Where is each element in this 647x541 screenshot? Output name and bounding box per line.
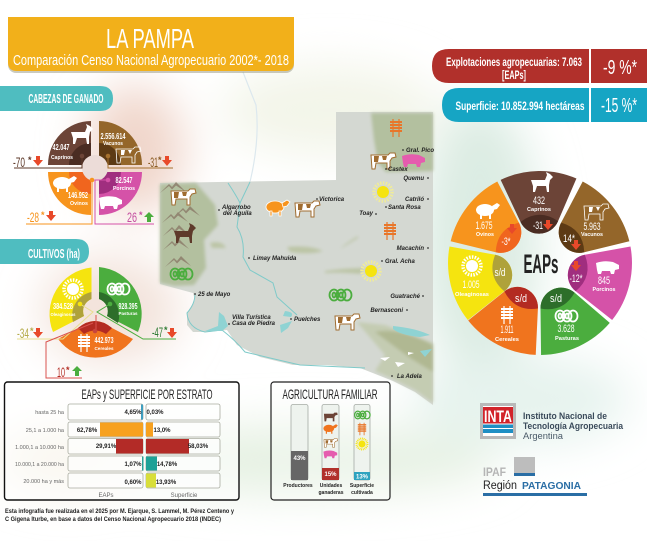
- map localities: Villa Turística: [232, 315, 271, 321]
- chart: livestock head count: 42.047: [52, 143, 70, 152]
- logo: IPAF Región Patagonia: IPAF: [483, 465, 506, 479]
- map localities: Gral. Pico: [406, 148, 434, 154]
- panel: agricultura familiar: Superficie: [350, 483, 374, 489]
- livestock change: caprinos: -70: [13, 154, 25, 170]
- EAPs values: Ovinos: [476, 232, 494, 238]
- wedge: oleaginosas: [442, 233, 521, 322]
- crop change: pasturas: *: [164, 325, 168, 335]
- chart: crop area: 442.973: [94, 336, 114, 345]
- livestock change: caprinos: *: [28, 155, 32, 165]
- map localities: Guatraché: [390, 294, 421, 300]
- panel: EAPs y superficie por estrato: EAPs: [98, 493, 114, 499]
- chart: livestock head count: Vacunos: [103, 141, 123, 147]
- callout: superficie: Superficie: 10.852.994 hectáreas: [456, 99, 585, 113]
- panel: EAPs y superficie por estrato: 0,03%: [146, 410, 164, 416]
- callout: explotaciones agropecuarias: [432, 49, 647, 83]
- livestock change: vacunos: *: [158, 155, 162, 165]
- EAPs icons: [463, 172, 619, 324]
- chart: livestock head count: 146.952: [68, 191, 88, 200]
- chart: crop area: [17, 267, 176, 378]
- panel: agricultura familiar: 15%: [324, 472, 337, 478]
- EAPs values: -3*: [502, 236, 511, 248]
- EAPs values: s/d: [550, 293, 562, 305]
- livestock change: porcinos: 26: [127, 209, 137, 225]
- livestock change: ovinos: -28: [27, 209, 39, 225]
- chart: livestock head count: Ovinos: [70, 201, 88, 207]
- livestock change: vacunos: -31: [148, 154, 158, 170]
- chart: EAPs radial: EAPs: [524, 249, 558, 279]
- chart: livestock head count: 82.547: [116, 176, 133, 185]
- logo: IPAF Región Patagonia: Región: [483, 480, 517, 492]
- map localities: Bernasconi: [370, 308, 403, 314]
- EAPs values: 1.005: [462, 279, 480, 291]
- crop change: oleaginosas: *: [30, 326, 34, 336]
- panel: EAPs y superficie por estrato: 1,07%: [124, 462, 142, 468]
- chart: crop area: Pasturas: [118, 311, 138, 317]
- EAPs values: 1.911: [500, 324, 514, 336]
- wedge: vacunos: [540, 177, 636, 275]
- wedge: pasturas: [518, 274, 613, 362]
- livestock change: porcinos: *: [139, 210, 143, 220]
- chart: livestock head count: Caprinos: [51, 155, 73, 161]
- EAPs values: 3.628: [558, 323, 574, 335]
- map localities: Quemu: [403, 176, 424, 182]
- credits text: [5, 509, 235, 523]
- panel: EAPs y superficie por estrato: 14,78%: [157, 462, 178, 468]
- EAPs values: Vacunos: [581, 232, 603, 238]
- map localities: Toay: [359, 211, 374, 217]
- logo: INTA: [480, 403, 624, 441]
- panel: agricultura familiar: Unidades: [320, 483, 342, 489]
- chart: EAPs radial: [442, 170, 638, 362]
- EAPs values: 14*: [563, 233, 576, 245]
- panel: agricultura familiar: ganaderas: [318, 490, 344, 496]
- heading: cabezas de ganado: CABEZAS DE GANADO: [28, 92, 104, 106]
- map localities: Victorica: [319, 197, 345, 203]
- crop change: cereales: [57, 364, 82, 380]
- panel: EAPs y superficie por estrato: 13,0%: [153, 428, 171, 434]
- credits text: C Gigena Iturbe, en base a datos del Censo Nacional Agropecuario 2018 (INDEC): [5, 517, 221, 523]
- wedge: caprinos: [501, 170, 577, 234]
- panel: EAPs y superficie por estrato: 0,60%: [124, 480, 142, 486]
- EAPs values: Cereales: [495, 337, 519, 343]
- map mountains: [160, 182, 200, 267]
- callout: explotaciones agropecuarias: Explotaciones agropecuarias: 7.063: [446, 55, 582, 69]
- heading: cultivos: CULTIVOS (ha): [28, 246, 80, 261]
- panel: EAPs y superficie por estrato: 4,65%: [124, 410, 142, 416]
- wedge: porcinos: [559, 233, 638, 322]
- crop change: pasturas: -47: [152, 324, 163, 340]
- callout: explotaciones agropecuarias: [EAPs]: [502, 68, 526, 82]
- wedge: ovinos: [444, 177, 540, 275]
- crop change: cereales: *: [66, 365, 70, 375]
- map localities: Catriló: [405, 197, 424, 203]
- EAPs values: 845: [598, 275, 610, 287]
- panel: EAPs y superficie por estrato: 13,93%: [156, 480, 177, 486]
- crop change: cereales: 10: [57, 364, 65, 380]
- map localities: Castex: [388, 167, 408, 173]
- credits text: Esta infografía fue realizada en el 2025 por M. Ejarque, S. Lammel, M. Pérez Centeno y: [5, 509, 235, 515]
- EAPs values: 432: [533, 195, 545, 207]
- chart: crop area: Oleaginosas: [50, 312, 76, 318]
- panel: EAPs y superficie por estrato: EAPs y SUPERFICIE POR ESTRATO: [82, 386, 213, 402]
- panel: agricultura familiar: AGRICULTURA FAMILIAR: [282, 386, 378, 402]
- livestock change: ovinos: [27, 209, 56, 225]
- wedge: cereales: [464, 272, 560, 362]
- panel: agricultura familiar: 13%: [356, 474, 369, 480]
- panel: agricultura familiar: 43%: [293, 456, 306, 462]
- title banner: LA PAMPA: [106, 23, 194, 54]
- map localities: Algarrobo: [221, 205, 251, 211]
- EAPs values: Pasturas: [555, 336, 579, 342]
- panel: EAPs y superficie por estrato: [4, 382, 239, 500]
- logo: INTA: Tecnología Agropecuaria: [523, 421, 624, 431]
- panel: EAPs y superficie por estrato: hasta 25 ha: [35, 410, 65, 416]
- EAPs values: Oleaginosas: [455, 292, 489, 298]
- EAPs values: 1.675: [476, 220, 492, 232]
- chart: livestock head count: [14, 121, 173, 224]
- logo: INTA: Instituto Nacional de: [523, 411, 607, 421]
- panel: EAPs y superficie por estrato: Superficie: [171, 493, 198, 499]
- map: La Pampa province: [160, 112, 433, 405]
- map localities: Macachín: [397, 246, 424, 252]
- logo: IPAF Región Patagonia: PATAGONIA: [522, 481, 581, 492]
- EAPs values: 5.963: [584, 221, 600, 233]
- panel: EAPs y superficie por estrato: 29,91%: [96, 444, 117, 450]
- logo: INTA: INTA: [484, 407, 512, 426]
- crop change: oleaginosas: -34: [17, 325, 29, 341]
- livestock change: caprinos: [13, 154, 43, 170]
- panel: EAPs y superficie por estrato: 20.000 ha y más: [23, 479, 64, 485]
- title banner: Comparación Censo Nacional Agropecuario 2002*- 2018: [13, 53, 289, 69]
- EAPs values: s/d: [494, 267, 506, 279]
- EAPs values: -12*: [570, 273, 583, 285]
- map localities: 25 de Mayo: [197, 292, 231, 298]
- logo: INTA: Argentina: [523, 431, 563, 441]
- map icons: crops and livestock by zone: [170, 119, 425, 330]
- livestock change: porcinos: [127, 209, 154, 225]
- EAPs values: -31: [533, 220, 543, 232]
- map localities: La Adela: [397, 374, 422, 380]
- map localities: Limay Mahuida: [253, 256, 297, 262]
- EAPs values: Porcinos: [592, 287, 616, 293]
- panel: agricultura familiar: cultivada: [351, 490, 373, 496]
- map localities: Gral. Acha: [385, 259, 415, 265]
- panel: agricultura familiar: [271, 382, 390, 500]
- chart: crop area: 928.395: [118, 302, 138, 311]
- EAPs values: s/d: [515, 293, 527, 305]
- panel: EAPs y superficie por estrato: 58,03%: [188, 444, 209, 450]
- chart: livestock head count: Porcinos: [113, 186, 135, 192]
- map localities: [194, 148, 434, 380]
- panel: agricultura familiar: Productores: [283, 483, 313, 489]
- heading: cabezas de ganado: [0, 86, 113, 111]
- chart: crop area: Cereales: [94, 346, 114, 352]
- callout: superficie: [442, 88, 647, 122]
- logo: IPAF Región Patagonia: [483, 457, 587, 496]
- livestock change: ovinos: *: [41, 210, 45, 220]
- chart: livestock head count: 2.556.614: [100, 132, 126, 141]
- heading: cultivos: [0, 239, 89, 264]
- map localities: Casa de Piedra: [232, 321, 276, 327]
- panel: EAPs y superficie por estrato: 62,78%: [77, 428, 98, 434]
- EAPs values: [455, 195, 616, 343]
- map localities: del Águila: [223, 210, 252, 217]
- EAPs values: Caprinos: [527, 207, 551, 213]
- map localities: Puelches: [294, 317, 321, 323]
- panel: EAPs y superficie por estrato: 25,1 a 1.000 ha: [26, 428, 65, 434]
- chart: crop area: 384.528: [53, 302, 73, 311]
- map localities: Santa Rosa: [388, 205, 421, 211]
- panel: EAPs y superficie por estrato: 10.000,1 a 20.000 ha: [15, 462, 65, 468]
- title banner: [8, 17, 294, 73]
- panel: EAPs y superficie por estrato: 1.000,1 a 10.000 ha: [15, 445, 65, 451]
